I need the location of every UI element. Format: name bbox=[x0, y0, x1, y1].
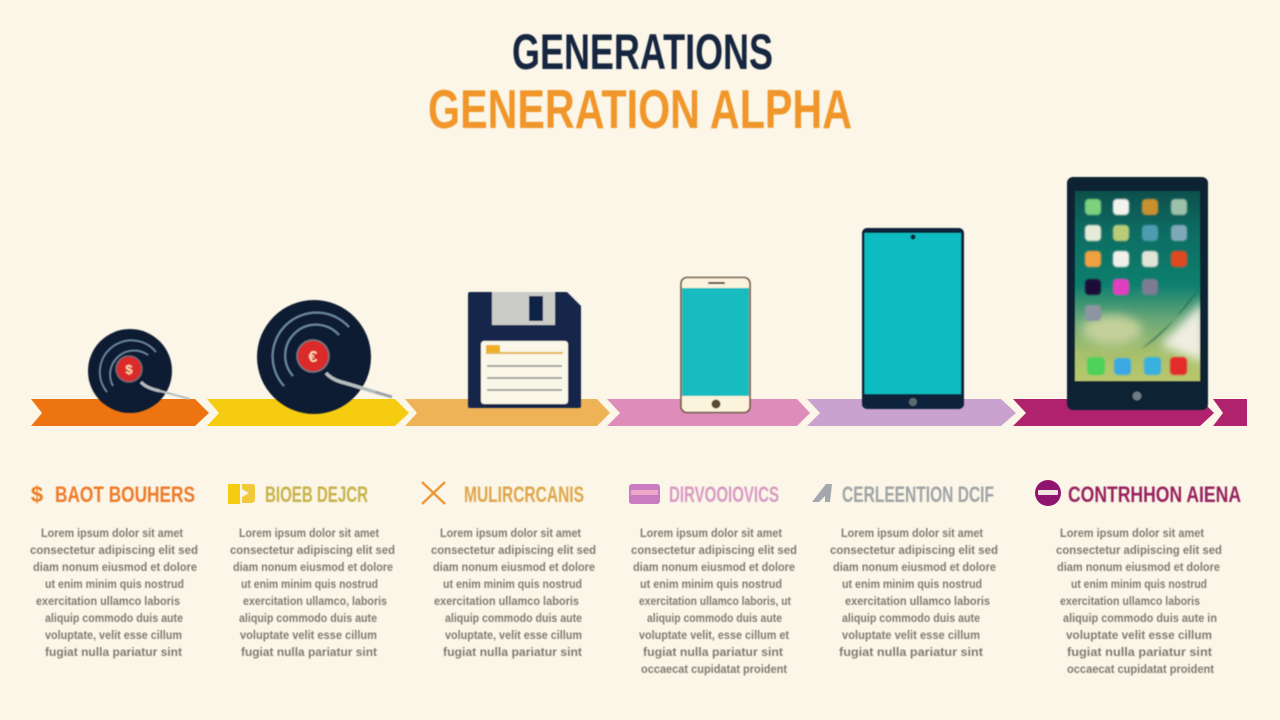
icon: floppy disk bbox=[468, 292, 581, 408]
heading: generation x: BIOEB DEJCR bbox=[265, 482, 368, 507]
text block: generation c: aliquip commodo duis aute bbox=[842, 611, 980, 625]
heading: generation alpha: CONTRHHON AIENA bbox=[1068, 482, 1241, 507]
text block: millennials: Lorem ipsum dolor sit amet bbox=[440, 526, 581, 540]
timeline arrows bbox=[31, 399, 1247, 426]
text block: generation alpha: diam nonum eiusmod et dolore bbox=[1057, 560, 1220, 574]
icon: magenta badge bbox=[1035, 480, 1061, 506]
text block: millennials: fugiat nulla pariatur sint bbox=[443, 645, 582, 659]
text block: gen z: aliquip commodo duis aute bbox=[647, 611, 782, 625]
arrow: generation alpha bbox=[1013, 399, 1214, 426]
icon: grey pen bbox=[812, 484, 832, 502]
arrow: baby boomers bbox=[31, 399, 209, 426]
icon: large vinyl record bbox=[257, 300, 392, 414]
text block: generation alpha: voluptate velit esse cillum bbox=[1066, 628, 1212, 642]
icon: app tablet bbox=[1067, 177, 1208, 410]
text block: baby boomers: diam nonum eiusmod et dolore bbox=[33, 560, 197, 574]
column: generation c bbox=[812, 482, 998, 659]
text block: gen z: occaecat cupidatat proident bbox=[641, 662, 787, 676]
text block: generation x: diam nonum eiusmod et dolore bbox=[233, 560, 393, 574]
icon: small vinyl record bbox=[88, 329, 190, 413]
text block: generation alpha: occaecat cupidatat proident bbox=[1067, 662, 1214, 676]
arrow: gen x bbox=[207, 399, 409, 426]
text block: generation c: ut enim minim quis nostrud bbox=[842, 577, 982, 591]
text block: millennials: exercitation ullamco laboris bbox=[434, 594, 579, 608]
text block: generation alpha: Lorem ipsum dolor sit amet bbox=[1060, 526, 1204, 540]
text block: generation alpha: exercitation ullamco laboris bbox=[1060, 594, 1200, 608]
text block: generation x bbox=[230, 526, 395, 659]
arrow: millennials bbox=[405, 399, 610, 426]
icon: small vinyl record: $ bbox=[125, 362, 133, 377]
icon: large vinyl record: € bbox=[309, 349, 318, 366]
text block: baby boomers: aliquip commodo duis aute bbox=[45, 611, 183, 625]
text block: generation alpha: fugiat nulla pariatur sint bbox=[1067, 645, 1212, 659]
text block: millennials: diam nonum eiusmod et dolore bbox=[433, 560, 595, 574]
heading: gen z: DIRVOOIOVICS bbox=[669, 482, 779, 507]
text block: gen z: ut enim minim quis nostrud bbox=[640, 577, 782, 591]
text block: millennials: ut enim minim quis nostrud bbox=[443, 577, 582, 591]
text block: baby boomers: voluptate, velit esse cillum bbox=[45, 628, 182, 642]
text block: baby boomers: consectetur adipiscing elit sed bbox=[30, 543, 198, 557]
text block: baby boomers: ut enim minim quis nostrud bbox=[45, 577, 184, 591]
text block: generation x: aliquip commodo duis aute bbox=[239, 611, 377, 625]
text block: generation c: diam nonum eiusmod et dolore bbox=[833, 560, 996, 574]
heading: generation c: CERLEENTION DCIF bbox=[842, 482, 994, 507]
text block: generation c: consectetur adipiscing elit sed bbox=[830, 543, 998, 557]
icon: smartphone bbox=[681, 278, 750, 412]
text block: gen z: Lorem ipsum dolor sit amet bbox=[640, 526, 782, 540]
text block: generation alpha bbox=[1056, 526, 1222, 676]
heading: millennials: MULIRCRCANIS bbox=[464, 482, 584, 507]
text block: generation x: exercitation ullamco, laboris bbox=[243, 594, 387, 608]
icon: yellow tag bbox=[228, 484, 255, 504]
icon: cross bbox=[422, 482, 445, 504]
text block: gen z: consectetur adipiscing elit sed bbox=[631, 543, 797, 557]
title: GENERATIONS bbox=[512, 24, 773, 80]
column: millennials bbox=[422, 482, 596, 659]
text block: gen z: fugiat nulla pariatur sint bbox=[643, 645, 783, 659]
text block: baby boomers: exercitation ullamco laboris bbox=[36, 594, 180, 608]
arrow: gen c bbox=[807, 399, 1016, 426]
heading: baby boomers: BAOT BOUHERS bbox=[55, 482, 195, 507]
column: generation x bbox=[228, 482, 395, 659]
text block: generation x: Lorem ipsum dolor sit amet bbox=[239, 526, 379, 540]
icon: dollar: $ bbox=[31, 482, 43, 507]
title bbox=[428, 24, 852, 140]
icon: pink card bbox=[629, 484, 660, 504]
text block: generation alpha: ut enim minim quis nostrud bbox=[1071, 577, 1207, 591]
column: gen z bbox=[629, 482, 797, 676]
text block: generation c: Lorem ipsum dolor sit amet bbox=[841, 526, 983, 540]
text block: generation alpha: consectetur adipiscing elit sed bbox=[1056, 543, 1222, 557]
text block: generation c: fugiat nulla pariatur sint bbox=[839, 645, 983, 659]
text block: generation x: fugiat nulla pariatur sint bbox=[241, 645, 377, 659]
text block: generation c: voluptate velit esse cillum bbox=[842, 628, 980, 642]
icon: teal tablet bbox=[862, 228, 964, 409]
arrow: gen z bbox=[607, 399, 810, 426]
text block: gen z: diam nonum eiusmod et dolore bbox=[633, 560, 795, 574]
text block: gen z: voluptate velit, esse cillum et bbox=[639, 628, 789, 642]
column: baby boomers bbox=[30, 482, 198, 659]
text block: generation c: exercitation ullamco laboris bbox=[845, 594, 990, 608]
text block: generation x: voluptate velit esse cillum bbox=[240, 628, 377, 642]
subtitle: GENERATION ALPHA bbox=[428, 78, 852, 140]
text block: millennials: consectetur adipiscing elit sed bbox=[431, 543, 596, 557]
text block: millennials: aliquip commodo duis aute bbox=[445, 611, 582, 625]
text block: baby boomers bbox=[30, 526, 198, 659]
text block: gen z: exercitation ullamco laboris, ut bbox=[639, 594, 791, 608]
text block: generation x: ut enim minim quis nostrud bbox=[241, 577, 378, 591]
app icons bbox=[1085, 199, 1187, 375]
arrow: tail end bbox=[1213, 399, 1247, 426]
text block: millennials: voluptate, velit esse cillum bbox=[445, 628, 582, 642]
text block: gen z bbox=[631, 526, 797, 676]
text block: millennials bbox=[431, 526, 596, 659]
text block: baby boomers: fugiat nulla pariatur sint bbox=[45, 645, 182, 659]
text block: generation x: consectetur adipiscing elit sed bbox=[230, 543, 395, 557]
text block: baby boomers: Lorem ipsum dolor sit amet bbox=[41, 526, 183, 540]
text block: generation alpha: aliquip commodo duis aute in bbox=[1063, 611, 1217, 625]
column: generation alpha bbox=[1035, 480, 1241, 676]
text block: generation c bbox=[830, 526, 998, 659]
